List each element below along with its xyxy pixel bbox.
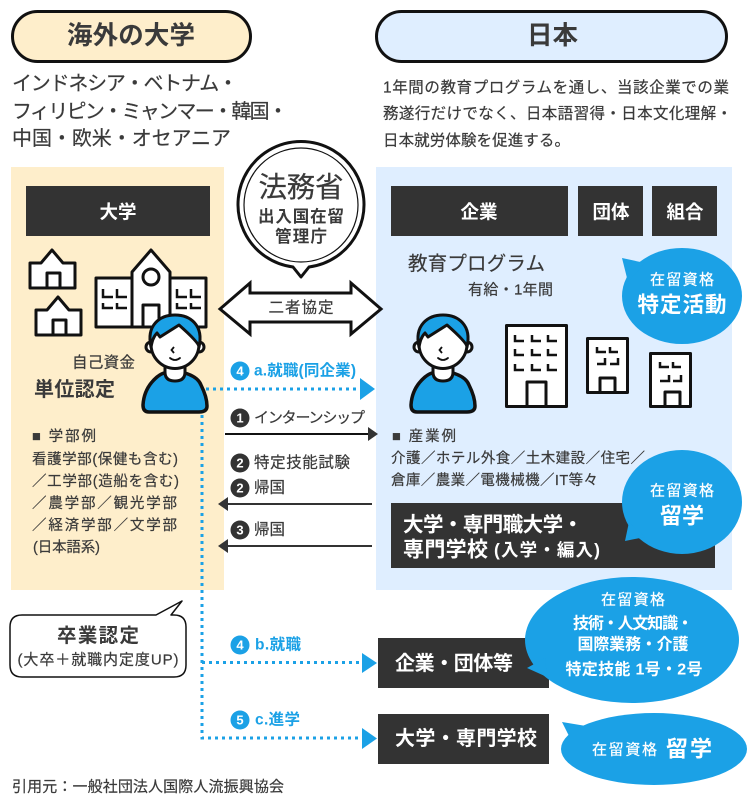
heading: Japan: 日本: [527, 22, 578, 50]
text block: Japan description: 1年間の教育プログラムを通し、当該企業での業: [383, 78, 729, 96]
callout: status student bottom: 在留資格: [592, 742, 657, 758]
arrow: internship: [225, 427, 378, 441]
callout: work status types: 国際業務・介護: [578, 636, 688, 654]
callout: work status types: 特定技能 1号・2号: [566, 660, 702, 678]
header: organization: 団体: [592, 202, 630, 222]
label: 2 specified skills test: 2: [236, 456, 244, 470]
text block: overseas countries: フィリピン・ミャンマー・韓国・: [12, 100, 288, 123]
icon: tall office building: [506, 326, 566, 406]
icon: small office building 2: [650, 354, 690, 406]
callout: status specified activities: [622, 248, 742, 344]
callout: work status types: 技術・人文知識・: [573, 614, 693, 632]
text block: overseas countries: インドネシア・ベトナム・: [12, 73, 238, 95]
label: 4a employment: [230, 360, 356, 380]
text block: overseas countries: [12, 73, 288, 150]
text block: faculty examples: 看護学部(保健も含む): [32, 451, 178, 468]
label: 3 return home: 帰国: [254, 520, 285, 538]
header: union: 組合: [666, 202, 704, 222]
badge: Ministry of Justice: [238, 142, 364, 277]
label: 3 return home: 3: [236, 522, 244, 538]
heading: overseas university: [12, 12, 250, 62]
box: university and vocational school: 大学・専門学校: [395, 727, 537, 750]
label: 5c further study: 5: [236, 712, 244, 728]
text block: industry examples: 介護／ホテル外食／土木建設／住宅／: [391, 450, 645, 467]
label: 2 return home: 帰国: [254, 478, 285, 496]
callout: work status types: 在留資格: [601, 592, 665, 608]
box: university and vocational school: [378, 714, 549, 764]
icon: school building: [96, 250, 206, 327]
callout: work status types: [525, 577, 739, 703]
text block: faculty examples: ／工学部(造船を含む): [32, 473, 179, 490]
header: university: [26, 186, 210, 236]
icon: student person: [143, 315, 207, 412]
panel: overseas university background: [11, 167, 224, 590]
arrow: two-party agreement: [220, 283, 381, 334]
text: credit recognition: 単位認定: [34, 378, 115, 401]
callout: status student bottom: 留学: [666, 736, 712, 762]
header: company: 企業: [460, 202, 498, 222]
icon: house 1: [30, 250, 75, 288]
header: union: [652, 186, 717, 236]
label: 4a employment: 4: [236, 364, 244, 378]
label: 4b employment: b.就職: [255, 636, 301, 654]
callout: status specified activities: 在留資格: [650, 272, 714, 288]
arrow: 5c further study: [362, 728, 377, 749]
label: 5c further study: [230, 710, 300, 730]
heading: overseas university: 海外の大学: [67, 22, 195, 50]
box: university and vocational schools: [391, 503, 715, 568]
badge: Ministry of Justice: 法務省: [258, 172, 344, 204]
label: 2 specified skills test: 特定技能試験: [254, 454, 350, 472]
box: company and organization etc: [378, 638, 549, 688]
text block: industry examples: ■ 産業例: [392, 428, 456, 445]
dotted path: student to next steps: [202, 389, 362, 738]
callout: status student: 留学: [660, 504, 704, 528]
label: 2 return home: 2: [236, 480, 244, 496]
callout: status specified activities: 特定活動: [638, 293, 726, 317]
text block: industry examples: 倉庫／農業／電機械機／IT等々: [391, 471, 598, 489]
callout: status student: [622, 450, 742, 554]
text block: faculty examples: ／農学部／観光学部: [32, 495, 177, 512]
text: education program: 教育プログラム: [408, 253, 545, 275]
label: 2 return home: [230, 478, 285, 498]
text block: industry examples: [391, 428, 645, 489]
header: company: [391, 186, 568, 236]
label: 1 internship: インターンシップ: [254, 410, 365, 426]
citation: 引用元：一般社団法人国際人流振興協会: [12, 778, 284, 796]
callout: graduation certification: (大卒＋就職内定度UP): [18, 652, 178, 668]
badge: Ministry of Justice: 管理庁: [275, 226, 327, 246]
text block: faculty examples: ■ 学部例: [32, 428, 96, 445]
label: 4b employment: 4: [236, 638, 244, 652]
arrow: 4b employment: [362, 653, 377, 673]
heading: Japan: [376, 12, 726, 62]
panel: Japan background: [376, 167, 732, 590]
text block: overseas countries: 中国・欧米・オセアニア: [12, 127, 231, 150]
text block: Japan description: 務遂行だけでなく、日本語習得・日本文化理解・: [383, 104, 732, 122]
text block: Japan description: 日本就労体験を促進する。: [383, 132, 570, 150]
text: self funding: 自己資金: [72, 354, 135, 372]
text block: faculty examples: ／経済学部／文学部: [32, 517, 177, 534]
arrow: return home 3: [218, 539, 372, 553]
callout: graduation certification: 卒業認定: [57, 625, 139, 647]
label: 4a employment: a.就職(同企業): [254, 360, 356, 380]
icon: small office building: [588, 338, 628, 392]
callout: status student: 在留資格: [650, 482, 714, 500]
box: university and vocational schools: 大学・専門職大学・: [403, 512, 583, 536]
arrow: 4a employment: [360, 378, 375, 400]
badge: Ministry of Justice: 出入国在留: [258, 207, 344, 226]
label: 1 internship: 1: [236, 410, 244, 426]
label: 4b employment: [230, 636, 301, 654]
header: organization: [578, 186, 643, 236]
text block: faculty examples: [32, 428, 179, 556]
text block: Japan description: [383, 78, 732, 150]
label: 3 return home: [230, 520, 285, 540]
box: university and vocational schools: (入学・編入): [494, 540, 600, 560]
box: university and vocational schools: 専門学校: [403, 538, 488, 562]
label: 5c further study: c.進学: [255, 710, 300, 728]
callout: status student bottom: [561, 713, 747, 785]
header: university: 大学: [99, 202, 137, 222]
callout: graduation certification: [10, 601, 186, 677]
text block: faculty examples: (日本語系): [33, 539, 100, 556]
box: company and organization etc: 企業・団体等: [395, 652, 513, 675]
arrow: return home 2: [218, 497, 372, 511]
text: paid one year: 有給・1年間: [468, 282, 553, 298]
icon: employee person: [411, 315, 475, 412]
arrow: two-party agreement: 二者協定: [268, 298, 334, 316]
icon: house 2: [36, 297, 81, 335]
